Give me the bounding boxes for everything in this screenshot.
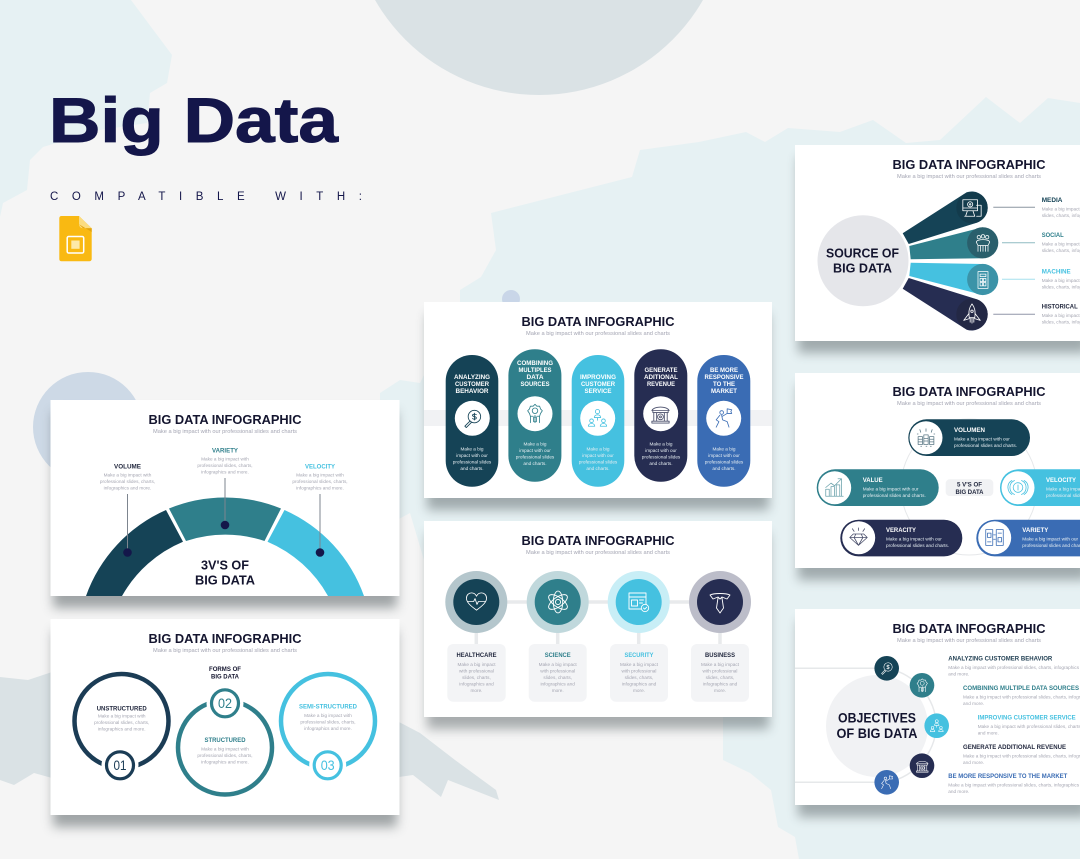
node: security (608, 571, 670, 702)
centre circle (826, 675, 928, 777)
pill: be more responsive to the market: and charts. (712, 466, 736, 471)
node: science: infographics and (540, 682, 575, 686)
objective 4: and more. (963, 760, 984, 765)
label: media: MEDIA (1042, 197, 1063, 204)
node: business: more. (714, 688, 726, 693)
node: security: Make a big impact (620, 662, 659, 667)
centre label: 5 V'S OF (957, 482, 982, 488)
panel: objectives pills (424, 302, 772, 510)
pill: be more responsive to the market: BE MORE (710, 367, 739, 374)
sub heading: Make a big impact with our professional slides and charts (897, 401, 1041, 407)
ray: historical (903, 278, 988, 331)
node: revenue (910, 753, 934, 778)
background: small blue circle (502, 290, 520, 308)
sub heading: Make a big impact with our professional slides and charts (526, 550, 670, 556)
pill: generate additional revenue: ADITIONAL (644, 374, 678, 381)
node: healthcare: Make a big impact (457, 662, 496, 667)
forms label: BIG DATA (211, 674, 239, 680)
pill: velocity (1000, 469, 1080, 506)
pill: value: Make a big impact with our (863, 486, 919, 492)
label: velocity: infographics and more. (296, 486, 344, 490)
ring 03: semi-structured: professional slides, charts, (300, 720, 356, 724)
panel: 3Vs of big data (50, 400, 400, 608)
background: top grey circle (350, 0, 728, 95)
icon: google slides (59, 216, 92, 261)
pill: improving customer service: professional slides (579, 460, 618, 464)
pill: improving customer service: impact with our (582, 453, 614, 458)
centre circle (818, 215, 908, 306)
pill: generate additional revenue: GENERATE (644, 367, 678, 374)
node: science: slides, charts, (543, 675, 572, 680)
pill: volumen: professional slides and charts. (954, 443, 1017, 448)
panel: 5 Vs (795, 373, 1080, 580)
pill: generate additional revenue: impact with our (645, 448, 677, 453)
node: business: with professional (703, 668, 737, 674)
heading: BIG DATA INFOGRAPHIC (892, 384, 1046, 399)
node: business: Make a big impact (701, 662, 740, 667)
ray: media (903, 192, 988, 244)
heading: BIG DATA INFOGRAPHIC (892, 621, 1046, 636)
label: variety: professional slides, charts, (197, 463, 253, 468)
pill: combining multiples data sources: and charts. (523, 461, 547, 466)
node: security: infographics and (622, 682, 657, 686)
pill: volumen: Make a big impact with our (954, 436, 1010, 442)
guide arc and lines (795, 668, 936, 782)
sub heading: Make a big impact with our professional slides and charts (897, 638, 1041, 644)
pill: analyzing customer behavior: Make a big (461, 446, 484, 452)
objective 2 (963, 685, 1080, 706)
pill: improving customer service: SERVICE (584, 388, 612, 395)
label: social (1042, 232, 1080, 253)
label: variety (197, 448, 253, 474)
connectors (476, 602, 720, 646)
objective 5: Make a big impact with professional slides, charts, infographics (948, 782, 1080, 788)
heading: BIG DATA INFOGRAPHIC (148, 631, 302, 646)
panel: source of big data (795, 145, 1080, 353)
node: healthcare: HEALTHCARE (456, 652, 497, 659)
ray: social (909, 227, 998, 259)
centre circle: BIG DATA (833, 261, 893, 276)
pill: be more responsive to the market: Make a big (713, 446, 736, 452)
ring 02: structured: 02 (218, 695, 232, 711)
pill: analyzing customer behavior: CUSTOMER (455, 381, 489, 388)
objective 5 (948, 773, 1080, 794)
pill: veracity: professional slides and charts. (886, 543, 949, 548)
sub heading: Make a big impact with our professional slides and charts (526, 331, 670, 337)
node: science: SCIENCE (545, 652, 571, 659)
pill: be more responsive to the market: RESPONSIVE (704, 374, 744, 381)
centre label (946, 479, 993, 496)
label: media (1042, 197, 1080, 218)
ray: machine (909, 263, 998, 295)
label: volume: Make a big impact with (104, 472, 152, 478)
objective 4: GENERATE ADDITIONAL REVENUE (963, 744, 1067, 751)
node: science (527, 571, 589, 702)
pill: be more responsive to the market: professional slides (705, 460, 744, 464)
arc segment: volume (86, 510, 183, 596)
ring 03: semi-structured (281, 674, 375, 784)
objective 1: ANALYZING CUSTOMER BEHAVIOR (948, 656, 1053, 662)
node: combining (910, 673, 934, 698)
ring 02: structured: professional slides, charts, (197, 753, 253, 758)
label: velocity: Make a big impact with (296, 472, 344, 478)
ring 02: structured (178, 685, 272, 794)
pill: generate additional revenue: professional slides (642, 454, 681, 460)
centre label: BIG DATA (195, 572, 256, 588)
node: responsive (874, 770, 899, 795)
ring 01: unstructured: 01 (114, 757, 127, 773)
grey band (424, 410, 772, 426)
pill: combining multiples data sources: SOURCES (520, 381, 550, 388)
ring 02: structured: Make a big impact with (201, 746, 249, 752)
sub heading: Make a big impact with our professional slides and charts (153, 648, 297, 654)
ring 02: structured: STRUCTURED (204, 737, 246, 744)
centre circle: OF BIG DATA (836, 725, 918, 741)
node: business: slides, charts, (706, 675, 734, 680)
pill: improving customer service: and charts. (586, 466, 610, 471)
label: volume (100, 464, 155, 490)
forms label (209, 666, 241, 680)
arc segment: velocity (268, 510, 364, 596)
pill: combining multiples data sources (508, 349, 561, 482)
connector lines and dots (123, 478, 324, 557)
heading: BIG DATA INFOGRAPHIC (522, 314, 675, 329)
centre circle: OBJECTIVES (838, 710, 916, 726)
pill: variety (976, 520, 1080, 556)
label: social: SOCIAL (1042, 232, 1064, 239)
pill: veracity: Make a big impact with our (886, 536, 942, 542)
ring 03: semi-structured: 03 (321, 757, 335, 773)
objective 1 (948, 656, 1080, 676)
pill: veracity (840, 520, 962, 556)
subtitle: compatible with: COMPATIBLE WITH: (50, 191, 362, 203)
label: historical (1042, 304, 1080, 325)
centre label: 3V'S OF (201, 558, 249, 572)
pill: analyzing customer behavior: professional slides (453, 460, 492, 464)
pill: veracity: VERACITY (886, 527, 917, 534)
ring 01: unstructured: Make a big impact with (98, 714, 146, 718)
pill: combining multiples data sources: impact with our (519, 448, 551, 453)
ring 03: semi-structured: SEMI-STRUCTURED (299, 704, 357, 710)
panel: objectives of big data (795, 609, 1080, 817)
pill: velocity: VELOCITY (1046, 477, 1077, 484)
node: business: infographics and (703, 682, 738, 686)
label: velocity: VELOCITY (305, 464, 336, 470)
ring 01: unstructured (74, 674, 168, 784)
pill: generate additional revenue: REVENUE (647, 381, 676, 388)
ring 03: semi-structured: Make a big impact with (304, 713, 352, 718)
pill: be more responsive to the market: impact with our (708, 453, 740, 458)
objective 3: and more. (978, 730, 999, 736)
objective 4 (963, 744, 1080, 765)
node: security: more. (633, 688, 645, 693)
heading: BIG DATA INFOGRAPHIC (892, 157, 1046, 172)
node: business: BUSINESS (705, 652, 736, 659)
objective 1: and more. (948, 672, 969, 676)
pill: value: VALUE (863, 477, 883, 484)
ring 03: semi-structured: infographics and more. (304, 726, 352, 731)
arc segment: variety (169, 497, 281, 541)
label: variety: VARIETY (212, 448, 239, 454)
panel: forms of big data (50, 619, 400, 827)
label: variety: Make a big impact with (201, 456, 249, 462)
node: healthcare: slides, charts, (462, 675, 491, 680)
ring 02: structured: infographics and more. (201, 760, 249, 764)
pill: generate additional revenue: and charts. (649, 461, 673, 466)
objective 2: and more. (963, 701, 984, 706)
objective 3 (978, 714, 1080, 736)
label: velocity (292, 464, 348, 490)
background: grey mountain left and lower (0, 672, 499, 800)
pill: variety: Make a big impact with our (1022, 536, 1078, 542)
pill: combining multiples data sources: DATA (526, 374, 544, 381)
sub heading: Make a big impact with our professional slides and charts (897, 174, 1041, 180)
guide circle (901, 419, 1037, 555)
pill: be more responsive to the market (697, 355, 750, 487)
pill: value (817, 469, 939, 506)
pill: be more responsive to the market: TO THE (713, 381, 736, 388)
ring 01: unstructured: infographics and more. (98, 726, 146, 732)
pill: generate additional revenue (634, 349, 687, 482)
node: healthcare: infographics and (459, 682, 494, 686)
centre circle: SOURCE OF (826, 245, 899, 260)
pill: be more responsive to the market: MARKET (711, 388, 737, 395)
pill: combining multiples data sources: professional slides (516, 454, 555, 460)
node: healthcare (445, 571, 507, 702)
node: security: with professional (622, 668, 656, 674)
panel: sectors (424, 521, 772, 729)
centre label: BIG DATA (956, 489, 984, 496)
label: machine (1042, 268, 1080, 290)
node: business (689, 571, 751, 702)
forms label: FORMS OF (209, 666, 241, 673)
pill: improving customer service: CUSTOMER (581, 381, 615, 388)
ring 01: unstructured: UNSTRUCTURED (97, 706, 147, 712)
label: volume: professional slides, charts, (100, 479, 155, 484)
label: velocity: professional slides, charts, (292, 479, 348, 484)
label: variety: infographics and more. (201, 470, 249, 474)
node: healthcare: more. (471, 688, 482, 693)
node: security: slides, charts, (625, 675, 653, 680)
pill: improving customer service: Make a big (587, 446, 610, 452)
node: science: with professional (540, 668, 575, 674)
heading: BIG DATA INFOGRAPHIC (148, 412, 302, 427)
objective 1: Make a big impact with professional slides, charts, infographics (948, 665, 1080, 670)
node: healthcare: with professional (459, 668, 494, 674)
objective 5: BE MORE RESPONSIVE TO THE MARKET (948, 773, 1067, 780)
label: machine: MACHINE (1042, 268, 1071, 276)
background: top-left light blue cloud (0, 0, 172, 217)
node: analyzing (874, 656, 899, 681)
pill: analyzing customer behavior: ANALYZING (454, 374, 490, 381)
leader lines (993, 207, 1035, 314)
pill: generate additional revenue: Make a big (650, 442, 673, 446)
pill: analyzing customer behavior: impact with our (456, 453, 488, 458)
pill: improving customer service: IMPROVING (580, 374, 616, 381)
main title: Big Data (49, 86, 339, 156)
pill: combining multiples data sources: MULTIPLES (518, 367, 552, 374)
node: science: Make a big impact (539, 662, 577, 667)
pill: combining multiples data sources: Make a big (524, 442, 547, 446)
centre label (195, 558, 256, 588)
background: blue circle (33, 372, 143, 482)
label: volume: infographics and more. (104, 486, 151, 490)
background: large light blue cloud (380, 97, 1080, 859)
sub heading: Make a big impact with our professional slides and charts (153, 429, 297, 435)
node: science: more. (552, 688, 564, 693)
ring 01: unstructured: professional slides, charts, (94, 720, 149, 725)
pill: variety: VARIETY (1022, 527, 1049, 534)
node: improving (924, 713, 949, 738)
pill: volumen: VOLUMEN (954, 427, 985, 434)
node: security: SECURITY (624, 652, 654, 659)
objective 5: and more. (948, 789, 969, 794)
pill: analyzing customer behavior: and charts. (460, 466, 484, 471)
pill: analyzing customer behavior: BEHAVIOR (456, 388, 489, 395)
pill: combining multiples data sources: COMBINING (517, 360, 553, 367)
pill: improving customer service (572, 355, 624, 487)
pill: volumen (908, 419, 1030, 456)
pill: analyzing customer behavior (446, 355, 498, 487)
pill: value: professional slides and charts. (863, 493, 926, 498)
label: volume: VOLUME (114, 464, 142, 470)
heading: BIG DATA INFOGRAPHIC (522, 533, 675, 548)
